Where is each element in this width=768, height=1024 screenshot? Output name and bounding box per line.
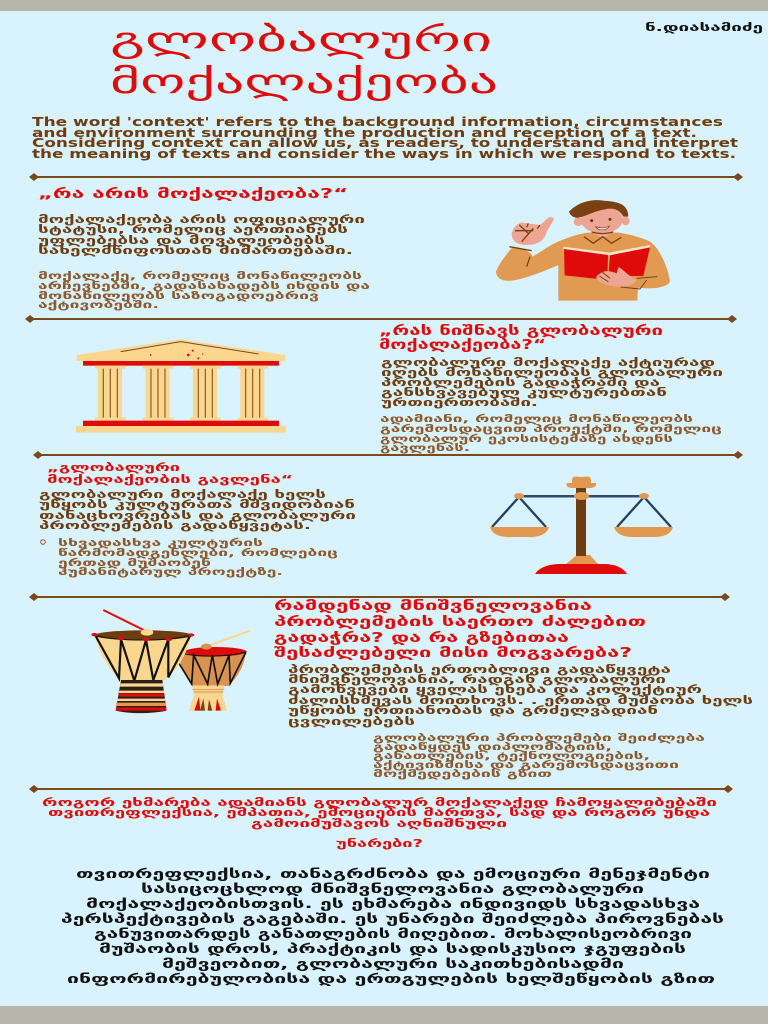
example text: მონაწილეობს საზოგადოებრივ	[38, 290, 319, 302]
author name: ნ.დიასამიძე	[645, 21, 763, 34]
panel: what is citizenship	[38, 187, 670, 311]
divider 3	[33, 451, 743, 459]
example text: არჩევნებში, გადასახადებს იხდის და	[38, 280, 370, 292]
icon: man reading a book	[496, 200, 670, 301]
definition text: მოქალაქეობა არის ოფიციალური	[38, 213, 365, 226]
answer text: თვითრეფლექსია, თანაგრძნობა და ემოციური მენეჯმენტი	[76, 866, 710, 881]
definition text: უფლებებსა და მოვალეობებს	[38, 234, 325, 247]
intro paragraph: The word 'context' refers to the background information, circumstances	[32, 114, 723, 129]
bullet	[41, 540, 45, 544]
example text: აქტივიზმისა და გარემოსდაცვითი	[373, 759, 680, 771]
question heading: გამოიმუშავოს აღნიშნული	[251, 817, 507, 830]
definition text: იღებს მონაწილეობას გლობალური	[381, 366, 723, 379]
definition text: განსხვავებულ კულტურებთან	[381, 386, 667, 399]
definition text: თანაცხოვრებას და გლობალური	[39, 509, 356, 522]
intro paragraph: Considering context can allow us, as readers, to understand and interpret	[32, 135, 738, 150]
example text: გავლენას.	[380, 442, 470, 454]
example text: გლობალური პრობლემები შეიძლება	[373, 732, 705, 744]
explanation text: უწყობს ერთიანობას და გრძელვადიან	[288, 704, 658, 717]
divider 4	[29, 593, 730, 601]
panel: solving problems together	[91, 599, 753, 780]
small drum stick	[210, 631, 250, 645]
definition text	[38, 213, 365, 257]
heading: შესაძლებელი მისი მოგვარება?	[274, 646, 632, 661]
example text	[38, 270, 370, 311]
example text	[380, 413, 722, 454]
explanation text: მნიშვნელოვანია, რადგან გლობალური	[288, 673, 666, 686]
heading	[274, 599, 646, 661]
example text: მოქალაქე, რომელიც მონაწილეობს	[38, 270, 363, 282]
example text: მოქმედებების გზით	[373, 768, 552, 780]
answer text: სასიცოცხლოდ მნიშვნელოვანია გლობალური	[141, 881, 644, 896]
title: გლობალური	[110, 20, 492, 60]
answer text: მუშაობის დროს, პრაქტიკის და სადისკუსიო ჯგუფების	[99, 941, 686, 956]
heading: „რას ნიშნავს გლობალური	[379, 324, 663, 339]
divider 1	[29, 173, 743, 181]
bottom band	[0, 1006, 768, 1024]
definition text: გლობალური მოქალაქე ხელს	[39, 488, 326, 501]
intro paragraph	[32, 114, 738, 161]
definition text: ურთიერთობაში.	[381, 396, 538, 409]
example text: სხვადასხვა კულტურის	[58, 537, 264, 549]
heading: გადაჭრა? და რა გზებითაა	[274, 631, 569, 646]
heading: „გლობალური	[47, 461, 180, 474]
panel: impact of global citizenship	[39, 461, 673, 578]
definition text	[39, 488, 356, 532]
answer text: ინფორმირებულობისა და ერთგულების ხელშეწყობის გზით	[67, 971, 715, 986]
example text	[58, 537, 338, 578]
large drum stick	[103, 610, 145, 631]
question heading	[42, 796, 717, 850]
definition text: პრობლემების გადაჭრაში და	[381, 376, 660, 389]
answer text: მოქალაქეობისთვის. ეს ეხმარება ინდივიდს სხვადასხვა	[86, 896, 700, 911]
icon: balance scales	[490, 477, 673, 574]
explanation text: ცვლილებებს	[288, 715, 415, 728]
heading	[47, 461, 293, 486]
intro paragraph: and environment surrounding the production and reception of a text.	[32, 125, 697, 140]
divider 5	[29, 785, 733, 793]
intro paragraph: the meaning of texts and consider the ways in which we respond to texts.	[32, 146, 736, 161]
example text: გლობალურ ეკოსისტემაზე ახდენს	[380, 433, 674, 445]
heading: პრობლემების საერთო ძალებით	[274, 615, 646, 630]
heading: „რა არის მოქალაქეობა?“	[38, 187, 348, 202]
example text: გარემოსდაცვით პროექტში, რომელიც	[380, 423, 722, 435]
example text: განათლების, ტექნოლოგიების,	[373, 750, 650, 762]
definition text: გლობალური მოქალაქე აქტიურად	[381, 356, 715, 369]
title	[110, 20, 498, 102]
example text: გადაწყდეს დიპლომატიის,	[373, 741, 612, 753]
answer text: განუვითარდეს განათლების მიღებით. მოხალისეობრივი	[94, 926, 692, 941]
example text	[373, 732, 705, 780]
definition text: პრობლემების გადაწყვეტას.	[39, 519, 311, 532]
question heading: როგორ ეხმარება ადამიანს გლობალურ მოქალაქედ ჩამოყალიბებაში	[42, 796, 717, 809]
answer text: მეშვეობით, გლობალური საკითხებისადმი	[162, 956, 624, 971]
icon: drums	[91, 610, 250, 713]
example text: ადამიანი, რომელიც მონაწილეობს	[380, 413, 694, 425]
definition text: უწყობს კულტურათა მშვიდობიან	[39, 498, 355, 511]
definition text: სტატუსი, რომელიც აერთიანებს	[38, 223, 348, 236]
definition text: სახელმწიფოსთან მიმართებაში.	[38, 244, 353, 257]
heading	[379, 324, 663, 353]
question heading: თვითრეფლექსია, ემპათია, ემოციების მართვა, სად და როგორ უნდა	[48, 806, 710, 819]
example text: წარმომადგენლები, რომლებიც	[58, 547, 338, 559]
heading: მოქალაქეობა?“	[379, 338, 546, 353]
answer text	[61, 866, 724, 986]
divider 2	[25, 315, 737, 323]
question heading: უნარები?	[336, 837, 423, 850]
panel: meaning of global citizenship	[76, 324, 723, 454]
top band	[0, 0, 768, 11]
icon: temple	[76, 339, 286, 433]
explanation text: პრობლემების ერთობლივი გადაწყვეტა	[288, 663, 671, 676]
example text: ერთად მუშაობენ	[58, 557, 212, 569]
explanation text: გამოწვევები ყველას ეხება და კოლექტიურ	[288, 683, 702, 696]
panel: skills question	[42, 796, 724, 986]
explanation text	[288, 663, 753, 728]
example text: ჰუმანიტარულ პროექტზე.	[58, 566, 283, 578]
example text: აქტივობებში.	[38, 299, 159, 311]
heading: რამდენად მნიშვნელოვანია	[274, 599, 592, 614]
heading: მოქალაქეობის გავლენა“	[47, 473, 293, 486]
answer text: პერსპექტივების გაგებაში. ეს უნარები შეიძლება პიროვნებას	[61, 911, 724, 926]
title: მოქალაქეობა	[110, 62, 498, 102]
explanation text: ძალისხმევას მოითხოვს. . ერთად მუშაობა ხელს	[288, 694, 753, 707]
definition text	[381, 356, 723, 409]
